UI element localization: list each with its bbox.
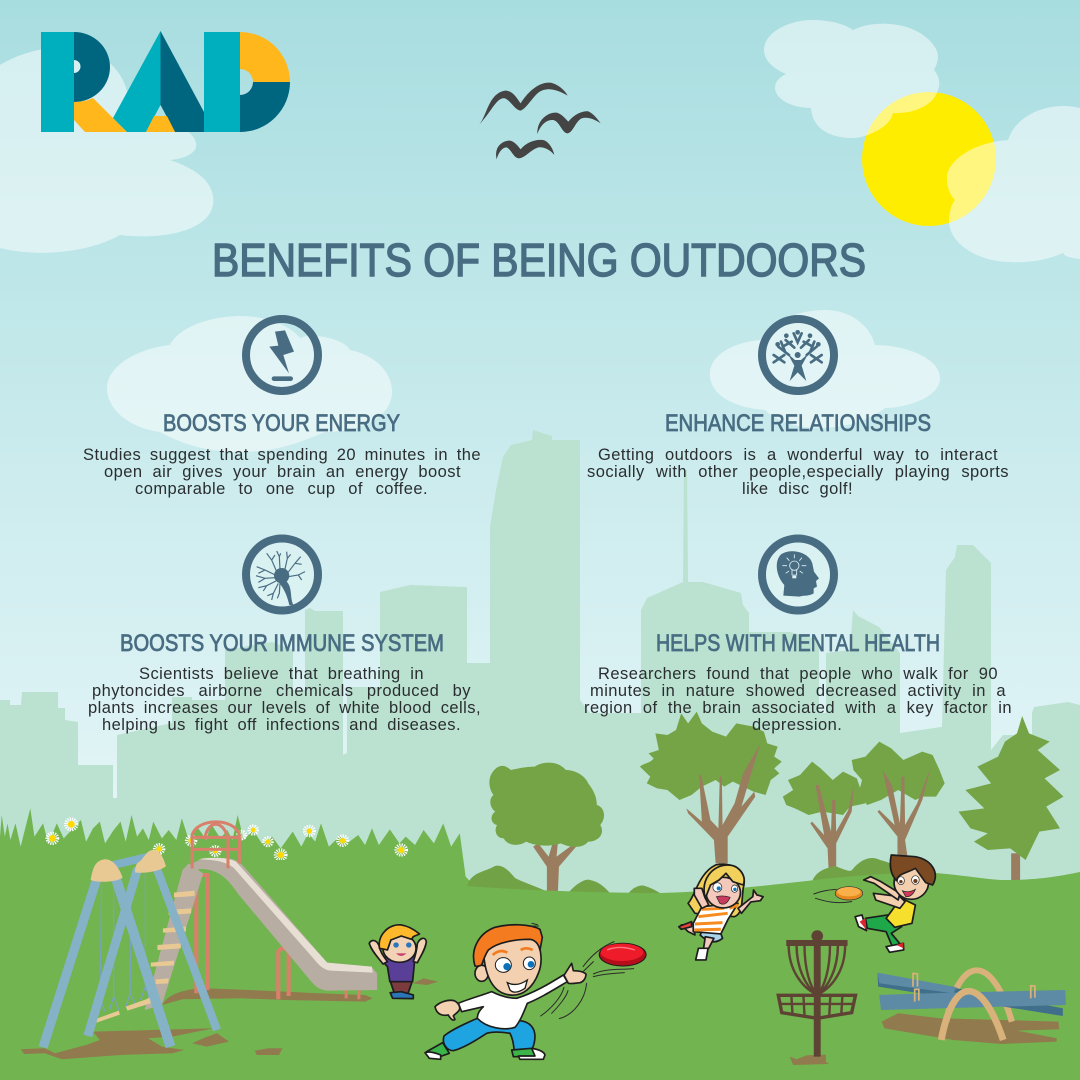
panel: enhance relationships: [540, 319, 1080, 510]
tree: large centre: [640, 712, 782, 863]
text block: socially with other people,especially playing sports: [587, 463, 1009, 481]
icon: people tree: [762, 319, 834, 391]
text block: region of the brain associated with a key factor in: [584, 699, 1012, 717]
panel: boosts your immune system: [0, 538, 540, 740]
heading: BOOSTS YOUR ENERGY: [163, 410, 400, 437]
disc golf basket: [778, 930, 855, 1065]
text block: plants increases our levels of white blood cells,: [88, 699, 481, 717]
child: main boy throwing disc: [425, 923, 587, 1059]
bushes and trees: [489, 712, 1063, 892]
text block: Scientists believe that breathing in: [139, 665, 424, 683]
text block: Getting outdoors is a wonderful way to interact: [598, 446, 998, 464]
bushes on the horizon: [467, 858, 910, 894]
text block: [0, 440, 540, 510]
seesaw: [878, 970, 1066, 1044]
text block: minutes in nature showed decreased activity in a: [590, 682, 1006, 700]
panel: helps with mental health: [540, 538, 1080, 740]
tree: round left: [489, 763, 604, 892]
slide: [145, 822, 377, 1010]
title: BENEFITS OF BEING OUTDOORS: [212, 234, 866, 286]
text block: phytoncides airborne chemicals produced by: [92, 682, 471, 700]
heading: HELPS WITH MENTAL HEALTH: [656, 630, 940, 657]
text block: open air gives your brain an energy boost: [104, 463, 461, 481]
text block: like disc golf!: [742, 480, 853, 498]
text block: Researchers found that people who walk for 90: [598, 665, 998, 683]
icon: neuron: [246, 538, 318, 610]
sun: [862, 92, 996, 226]
text block: [540, 660, 1080, 740]
swing set and slide: [21, 822, 438, 1059]
child: boy with brown hair: [814, 855, 935, 952]
child: blonde girl: [679, 864, 763, 960]
daisies: [48, 820, 406, 859]
icon: head with light bulb: [762, 538, 834, 610]
ground: [0, 860, 1080, 1080]
cloud: top left: [0, 48, 213, 253]
text block: depression.: [752, 716, 842, 734]
heading: BOOSTS YOUR IMMUNE SYSTEM: [120, 630, 444, 657]
grass meadow with blades: [0, 808, 475, 887]
city skyline silhouette: [0, 430, 1080, 900]
text block: helping us fight off infections and diseases.: [102, 716, 461, 734]
swing set: [43, 850, 217, 1047]
red disc and motion lines: [583, 942, 646, 977]
cloud: behind energy icon: [107, 316, 392, 452]
cloud: right: [947, 106, 1080, 262]
heading: ENHANCE RELATIONSHIPS: [665, 410, 931, 437]
text block: Studies suggest that spending 20 minutes in the: [83, 446, 481, 464]
text block: [540, 440, 1080, 510]
text block: [0, 660, 540, 740]
cloud: top right: [764, 20, 939, 138]
birds: [479, 83, 601, 159]
child: small boy waving: [369, 925, 426, 999]
icon: lightning bolt: [246, 319, 318, 391]
tree: right of pair: [852, 742, 945, 857]
text block: comparable to one cup of coffee.: [135, 480, 428, 498]
tree: pine: [958, 716, 1063, 883]
dirt shadows: [21, 978, 438, 1059]
logo: RAD: [41, 31, 290, 132]
cloud: behind relationships icon: [710, 310, 940, 428]
tree: small centre-right: [783, 762, 865, 870]
panel: boosts your energy: [0, 319, 540, 510]
